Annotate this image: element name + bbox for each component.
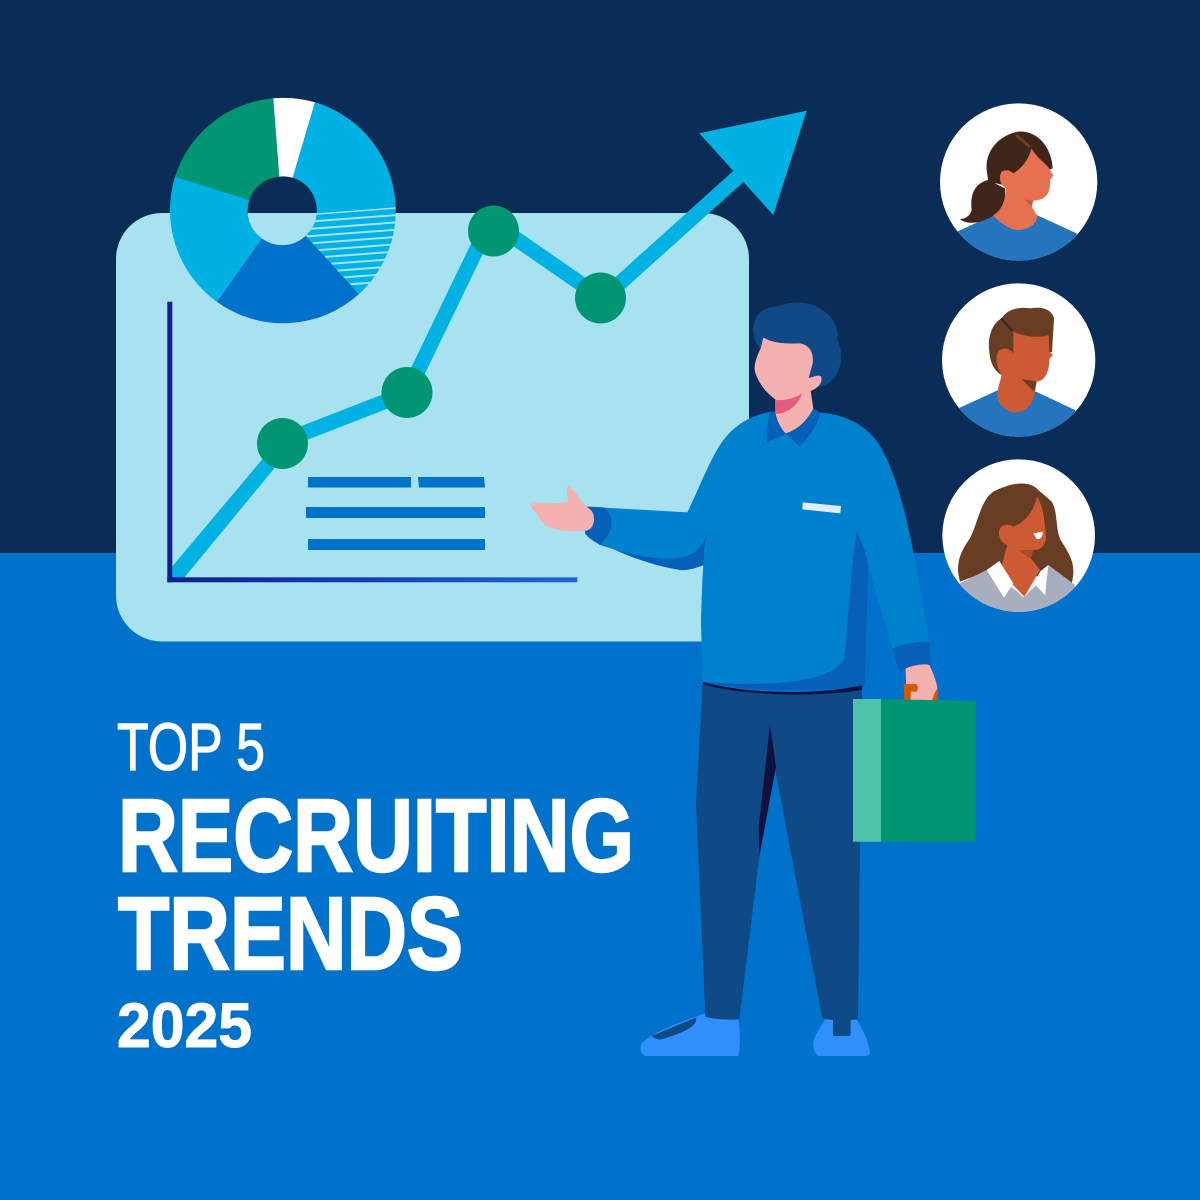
title line: year: 2025: [117, 991, 252, 1061]
shirt: [958, 390, 1075, 442]
title block: [117, 710, 634, 1061]
sweater: [587, 412, 929, 684]
ponytail: [960, 180, 1005, 223]
portrait: woman with ponytail: [940, 103, 1097, 263]
collar: [766, 408, 821, 447]
pie chart: [170, 98, 400, 323]
trouser shadow: [759, 725, 776, 857]
right cuff: [893, 642, 931, 673]
arrow head: [699, 111, 807, 215]
collar left: [987, 561, 1013, 598]
chart axes: [167, 302, 577, 582]
face and neck: [997, 332, 1053, 412]
hair line: [1001, 318, 1013, 331]
background: blue bottom band: [0, 553, 1200, 1200]
pie slice: cyan left: [170, 177, 262, 302]
name badge: [802, 502, 841, 513]
left shoe stripe: [652, 1017, 696, 1039]
face: [993, 148, 1053, 230]
bag body: [881, 699, 976, 842]
hair: [989, 308, 1054, 375]
pie slice: white: [273, 98, 315, 178]
arm underside: [585, 533, 707, 570]
title line: top 5: TOP 5: [117, 710, 265, 785]
bag side: [853, 699, 881, 842]
legs and shoes: [640, 682, 870, 1056]
trend line: remaining segments: [282, 166, 750, 442]
hair: [753, 302, 841, 387]
chin shadow: [1018, 550, 1033, 559]
pie slice: hatched: [300, 207, 400, 294]
pie slice: green: [175, 98, 279, 200]
bag handle: [904, 684, 938, 701]
left shoe: [640, 1013, 740, 1056]
right shoe tongue: [833, 1017, 851, 1036]
hair: [987, 132, 1053, 185]
carrying hand: [906, 664, 937, 701]
neck shadow: [775, 393, 802, 414]
shopping bag: [853, 699, 976, 842]
background: dark top band: [0, 0, 1200, 553]
upper body: [531, 302, 938, 701]
trousers: [696, 683, 862, 1020]
blouse: [960, 565, 1075, 615]
portrait: man: [942, 283, 1095, 442]
pointing hand: [531, 486, 594, 531]
face and neck: [755, 338, 822, 433]
chin shadow: [1024, 199, 1033, 207]
collar right: [1034, 565, 1048, 595]
trend line: first segment: [172, 448, 285, 578]
collar inner: [1012, 580, 1036, 598]
face and neck: [999, 497, 1046, 597]
portrait: woman with long hair: [942, 459, 1095, 615]
smile: [1033, 532, 1043, 539]
hair: [958, 484, 1073, 583]
man figure: [531, 302, 938, 1056]
data points: [257, 206, 626, 469]
hair highlights: [1016, 135, 1030, 147]
right shoe: [813, 1019, 870, 1056]
left cuff: [585, 507, 612, 545]
title line: trends: TRENDS: [118, 876, 463, 991]
chart text lines: [306, 477, 485, 550]
belt shadow: [703, 682, 862, 695]
chin shadow: [1022, 379, 1037, 392]
shirt: [953, 215, 1077, 263]
panel: chart board: [116, 213, 749, 642]
sweater shadow: [703, 532, 868, 690]
pie slice: cyan right: [293, 102, 396, 213]
pie slice: blue: [217, 236, 359, 323]
line chart with arrow: [172, 111, 807, 578]
title line: recruiting: RECRUITING: [118, 778, 634, 893]
